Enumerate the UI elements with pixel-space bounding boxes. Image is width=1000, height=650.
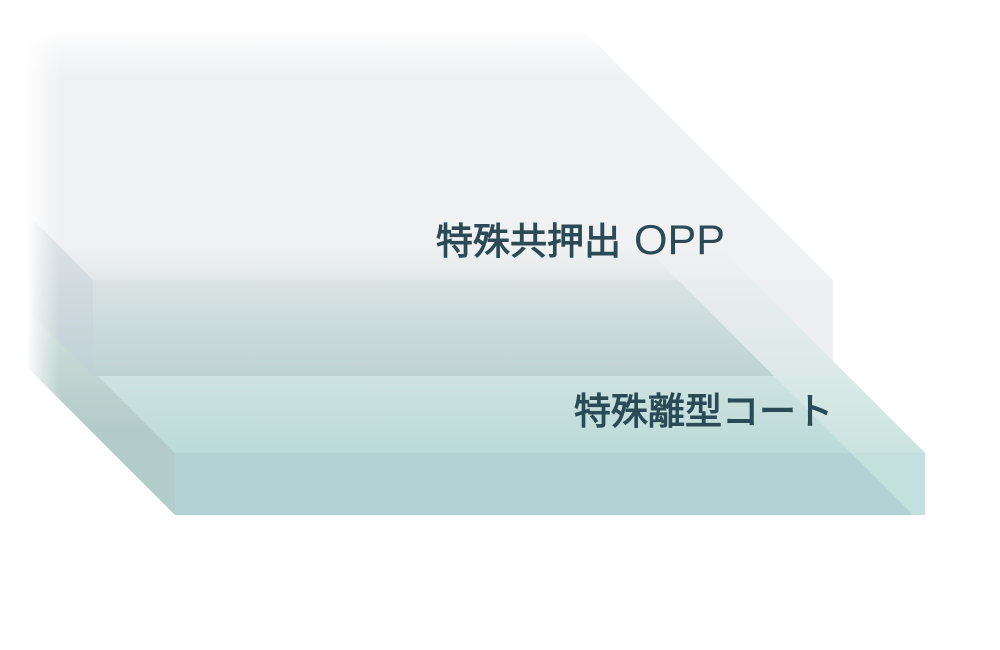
label: 特殊共押出 OPP: OPP	[634, 216, 725, 263]
lower slab: special release coat	[26, 304, 925, 515]
fade at top and left edges	[0, 0, 640, 520]
label: 特殊共押出 OPP	[436, 216, 725, 263]
upper slab: special co-extruded OPP	[26, 30, 833, 376]
label: 特殊離型コート: 特殊離型コート	[574, 391, 833, 432]
label: 特殊共押出 OPP: 特殊共押出	[436, 221, 621, 262]
lower slab seen through upper slab	[59, 245, 833, 376]
